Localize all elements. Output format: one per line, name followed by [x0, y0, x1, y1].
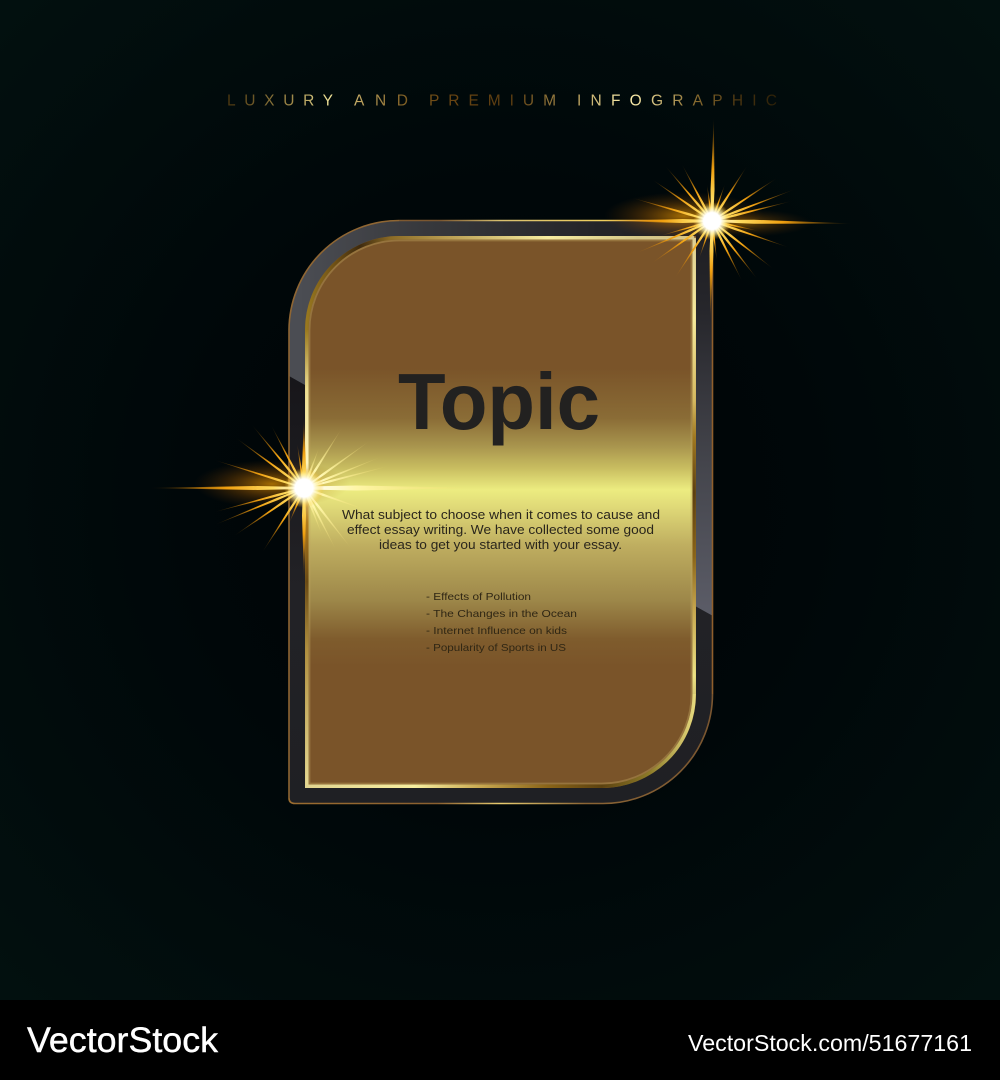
- frame: dark lower section: [289, 376, 713, 804]
- frame: grey upper section: [289, 220, 713, 616]
- panel: card: [289, 220, 713, 804]
- description text: ideas to get you started with your essay.: [379, 538, 622, 552]
- icon: sparkle top right: [604, 117, 852, 321]
- frame: grey right side: [695, 220, 713, 616]
- footer: image id: VectorStock.com/51677161: [688, 1030, 972, 1056]
- heading: Topic: Topic: [398, 357, 600, 446]
- bullet list: - Popularity of Sports in US: [426, 642, 566, 654]
- description text: [342, 508, 660, 552]
- gold plate border: [305, 238, 694, 786]
- description text: What subject to choose when it comes to cause and: [342, 508, 660, 522]
- title: AND: [354, 92, 408, 110]
- bullet list: - Internet Influence on kids: [426, 625, 567, 637]
- gold plate: [305, 236, 696, 788]
- footer: logo: VectorStock: [27, 1021, 219, 1060]
- title: [227, 92, 777, 110]
- footer bar: [0, 1000, 1000, 1080]
- title: INFOGRAPHIC: [577, 92, 777, 110]
- icon: sparkle left: [149, 418, 479, 580]
- bullet list: [426, 591, 577, 654]
- bullet list: - The Changes in the Ocean: [426, 608, 577, 620]
- description text: effect essay writing. We have collected some good: [347, 523, 654, 537]
- title: LUXURY: [227, 92, 333, 110]
- bullet list: - Effects of Pollution: [426, 591, 531, 603]
- frame: copper outline: [289, 220, 713, 804]
- title: PREMIUM: [429, 92, 556, 110]
